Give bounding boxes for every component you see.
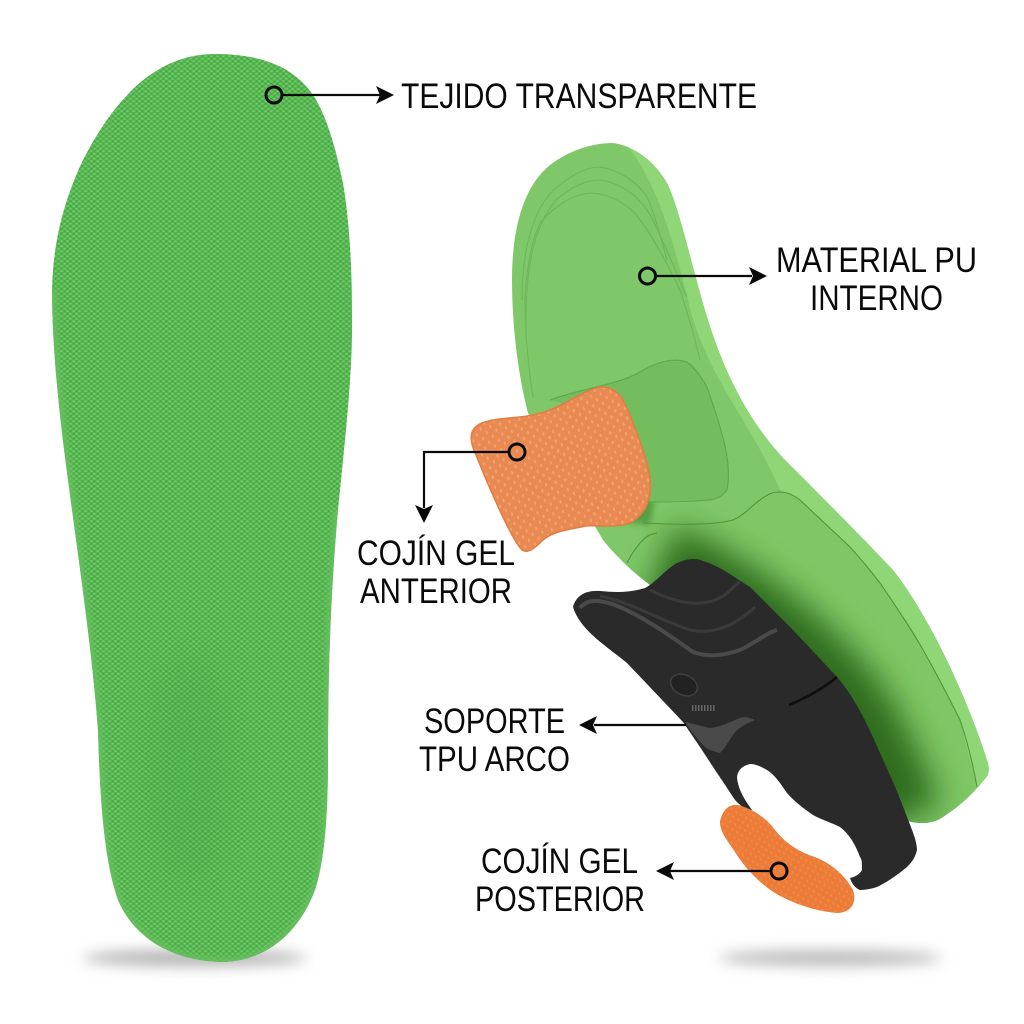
anterior gel pad xyxy=(471,387,650,551)
raised contour lines xyxy=(550,360,977,787)
callout: soporte TPU arco: TPU ARCO xyxy=(419,740,570,779)
callout: cojín gel posterior: COJÍN GEL xyxy=(481,842,638,881)
shadow: right parts xyxy=(718,950,942,966)
callout: cojín gel anterior: COJÍN GEL xyxy=(357,534,515,573)
callout: soporte TPU arco xyxy=(419,702,686,779)
small text mark xyxy=(692,705,715,711)
callout: tejido transparente: TEJIDO TRANSPARENTE xyxy=(401,77,757,116)
posterior gel pad xyxy=(720,805,854,913)
callout: cojín gel anterior: ANTERIOR xyxy=(360,572,512,611)
callout: cojín gel anterior xyxy=(357,444,525,611)
callout: material PU interno: MATERIAL PU xyxy=(776,241,977,280)
callout: cojín gel posterior: POSTERIOR xyxy=(475,880,645,919)
callout: tejido transparente xyxy=(266,77,757,116)
left insole: transparent mesh fabric xyxy=(52,54,352,962)
callout: cojín gel posterior xyxy=(475,842,787,919)
shadow: left insole xyxy=(83,950,307,966)
right insole: inner PU material xyxy=(512,143,995,830)
logo badge xyxy=(667,670,701,700)
callout: material PU interno xyxy=(640,241,977,318)
callout: material PU interno: INTERNO xyxy=(810,279,943,318)
callout: soporte TPU arco: SOPORTE xyxy=(424,702,565,741)
TPU arch support (black) xyxy=(573,559,917,890)
